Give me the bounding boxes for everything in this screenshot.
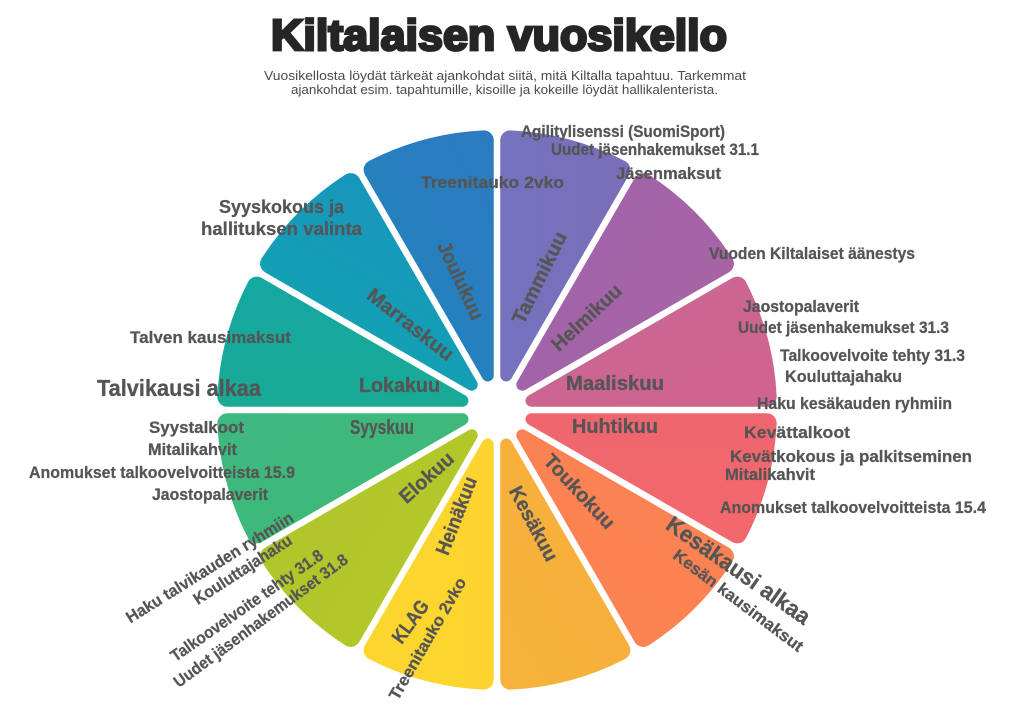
events: Heinäkuu: Treenitauko 2vko [386, 575, 470, 703]
events: Maaliskuu [738, 298, 965, 413]
events: Elokuu [123, 509, 352, 691]
events: Marraskuu [201, 197, 363, 239]
event: Joulukuu: Treenitauko 2vko [421, 174, 564, 192]
events: Huhtikuu: Mitalikahvit [725, 466, 816, 484]
events: Toukokuu: Kesän kausimaksut [669, 546, 807, 656]
events: Marraskuu: hallituksen valinta [201, 219, 363, 239]
events: Maaliskuu: Kouluttajahaku [785, 368, 902, 386]
events: Lokakuu [97, 329, 292, 401]
wedge: Helmikuu [514, 169, 752, 452]
events: Syyskuu [29, 419, 295, 504]
month: Tammikuu: Tammikuu [508, 228, 572, 328]
month: Marraskuu: Marraskuu [362, 284, 458, 366]
wedge: Syyskuu [188, 309, 471, 547]
events: Lokakuu: Talven kausimaksut [130, 329, 292, 347]
events: Huhtikuu: Kevätkokous ja palkitseminen [730, 448, 972, 466]
events: Syyskuu: Syystalkoot [149, 419, 245, 437]
events: Lokakuu: Talvikausi alkaa [97, 375, 261, 401]
event: Helmikuu: Vuoden Kiltalaiset äänestys [709, 245, 915, 263]
month: Lokakuu: Lokakuu [359, 375, 440, 397]
month: Toukokuu: Toukokuu [539, 450, 619, 534]
events: Elokuu: Talkoovelvoite tehty 31.8 [167, 546, 327, 666]
wedge: Marraskuu [256, 155, 539, 393]
events: Huhtikuu [720, 424, 987, 517]
wedge: Kesäkuu [396, 436, 634, 719]
month: Kesäkuu: Kesäkuu [504, 483, 562, 565]
wedge: Maaliskuu [523, 273, 806, 511]
events: Tammikuu [521, 123, 759, 183]
month: Helmikuu: Helmikuu [547, 280, 627, 356]
month: Syyskuu: Syyskuu [350, 417, 414, 439]
wedge: Huhtikuu [526, 413, 777, 543]
intro text: ajankohdat esim. tapahtumille, kisoille ja kokeille löydät hallikalenterista. [291, 83, 718, 97]
events: Maaliskuu: Haku kesäkauden ryhmiin [757, 395, 952, 413]
year wheel [188, 101, 806, 719]
events: Marraskuu: Syyskokous ja [219, 197, 345, 217]
events: Maaliskuu: Talkoovelvoite tehty 31.3 [780, 347, 965, 365]
events: Elokuu: Uudet jäsenhakemukset 31.8 [170, 551, 352, 691]
events: Tammikuu: Uudet jäsenhakemukset 31.1 [551, 141, 759, 159]
events: Huhtikuu: Kevättalkoot [744, 424, 851, 442]
events: Maaliskuu: Jaostopalaverit [743, 298, 859, 316]
events: Tammikuu: Agilitylisenssi (SuomiSport) [521, 123, 725, 141]
wedge: Heinäkuu [364, 439, 494, 690]
wedge: Elokuu [242, 368, 480, 651]
events: Toukokuu: Kesäkausi alkaa [661, 511, 816, 630]
wedge: Tammikuu [500, 130, 630, 381]
intro text: Vuosikellosta löydät tärkeät ajankohdat siitä, mitä Kiltalla tapahtuu. Tarkemmat [264, 69, 747, 83]
month: Joulukuu: Joulukuu [432, 238, 488, 324]
intro text [264, 69, 747, 97]
events: Elokuu: Kouluttajahaku [190, 531, 296, 609]
title: Kiltalaisen vuosikello [271, 11, 727, 60]
events: Maaliskuu: Uudet jäsenhakemukset 31.3 [738, 319, 949, 337]
month: Heinäkuu: Heinäkuu [432, 474, 482, 558]
month: Huhtikuu: Huhtikuu [572, 416, 658, 438]
events: Syyskuu: Anomukset talkoovelvoitteista 15.9 [29, 464, 295, 482]
wedge: Toukokuu [455, 427, 738, 665]
wedge: Joulukuu [360, 101, 598, 384]
events: Syyskuu: Mitalikahvit [148, 441, 237, 459]
events: Syyskuu: Jaostopalaverit [152, 486, 268, 504]
events: Elokuu: Haku talvikauden ryhmiin [123, 509, 297, 627]
wedge: Lokakuu [217, 277, 468, 407]
month: Elokuu: Elokuu [395, 448, 459, 508]
events: Heinäkuu: KLAG [388, 596, 434, 648]
month labels [350, 228, 664, 565]
events: Tammikuu: Jäsenmaksut [616, 165, 722, 183]
month: Maaliskuu: Maaliskuu [566, 373, 664, 395]
events: Huhtikuu: Anomukset talkoovelvoitteista 15.4 [720, 499, 987, 517]
